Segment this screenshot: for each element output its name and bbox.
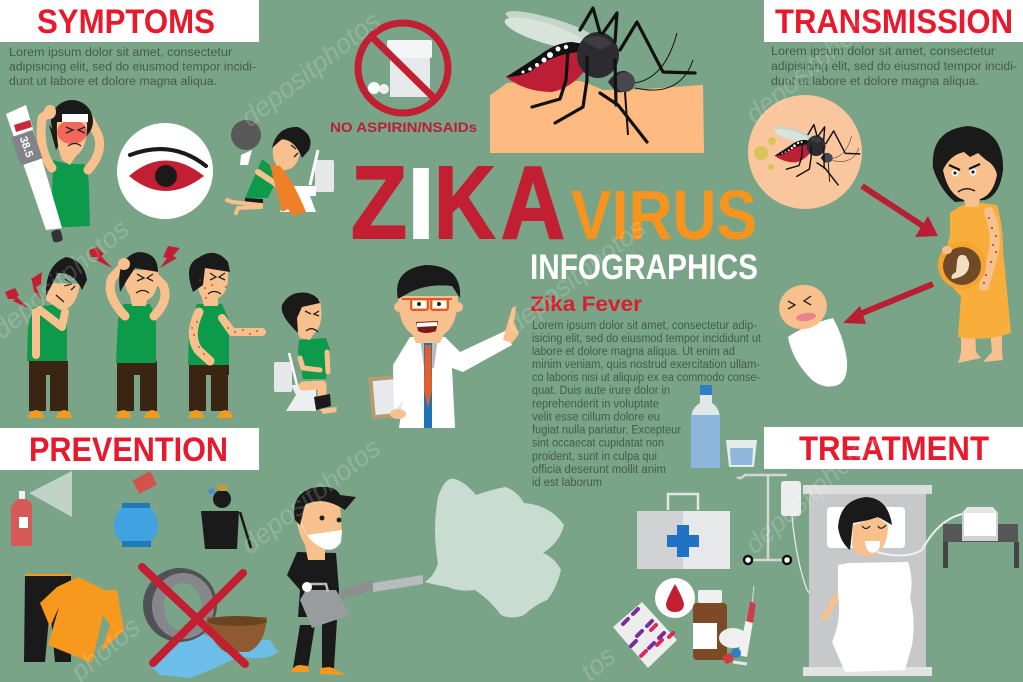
symptoms text block: Lorem ipsum dolor sit amet, consectetur [9, 47, 232, 59]
text block: zika fever description: reprehenderit in voluptate [532, 398, 659, 410]
symptoms heading: SYMPTOMS [37, 3, 215, 41]
label: no aspirin: NO ASPIRIN/NSAIDs [330, 119, 477, 135]
title: ZIKA: Z [351, 145, 407, 260]
icon: feverish man [41, 100, 100, 228]
text block: zika fever description: sint occaecat cupidatat non [532, 438, 664, 450]
icon: doctor [368, 265, 519, 428]
icon: man with headache [89, 246, 180, 418]
icon: insect spray [11, 471, 72, 546]
symptoms heading [0, 0, 259, 42]
text block: zika fever description: labore et dolore magna aliqua. Ut enim ad [532, 346, 735, 358]
title: ZIKA: A [501, 145, 565, 260]
icon: man with fogger [287, 487, 423, 675]
icon: pregnant woman [933, 126, 1011, 363]
text block: zika fever description: fugiat nulla pariatur. Excepteur [532, 424, 681, 436]
icon: thermometer: 38.5 [17, 135, 35, 159]
icon: mosquito in skin circle [748, 95, 862, 209]
icon: mosquito biting [502, 6, 695, 142]
watermarks: depositphotos [500, 213, 651, 340]
arrow: mother to baby [843, 284, 933, 324]
transmission text block: dunt ut labore et dolore magna aliqua. [771, 76, 979, 88]
icon: iv stand [737, 475, 838, 603]
watermarks: depositphotos [235, 6, 386, 133]
text block: zika fever description: velit esse cillum dolore eu [532, 412, 660, 424]
transmission text block [771, 46, 1017, 88]
panel: prevention [0, 428, 564, 678]
heading: zika fever: Zika Fever [530, 293, 642, 316]
icon: covered water jar [114, 471, 158, 547]
icon: standing water crossed out [142, 567, 278, 678]
icon: vomiting man [227, 120, 334, 216]
symptoms text block: adipisicing elit, sed do eiusmod tempor incidi- [9, 62, 256, 74]
arrow: mosquito to mother [862, 186, 938, 237]
watermarks: depositphotos [235, 433, 386, 560]
prevention heading: PREVENTION [29, 431, 228, 469]
text block: zika fever description: Lorem ipsum dolor sit amet, consectetur adip- [532, 320, 757, 332]
text block: zika fever description: co laboris nisi ut aliquip ex ea commodo conse- [532, 372, 760, 384]
icon: thermometer [6, 105, 63, 243]
icon: man on toilet [274, 292, 337, 414]
watermarks: depositphotos [739, 425, 884, 559]
icon: red eye [117, 123, 213, 219]
icon: medicine bottle [693, 590, 727, 660]
icon: patient in bed [803, 485, 932, 676]
transmission text block: Lorem ipsum dolor sit amet, consectetur [771, 46, 995, 58]
icon: pill pack [613, 602, 677, 668]
text block: zika fever description: proident, sunt in culpa qui [532, 451, 657, 463]
panel: treatment [613, 427, 1023, 676]
title: VIRUS: VIRUS [571, 176, 757, 254]
panel: symptoms [0, 0, 337, 418]
text block: zika fever description: minim veniam, quis nostrud exercitation ullam- [532, 359, 760, 371]
icon: crying baby [774, 280, 847, 387]
text block: zika fever description: id est laborum [532, 477, 602, 489]
treatment heading: TREATMENT [799, 430, 989, 468]
title: ZIKA [351, 145, 565, 261]
text block: zika fever description: isicing elit, sed do eiusmod tempor incididunt ut [532, 333, 762, 345]
icon: trash bin [201, 485, 251, 549]
text block: zika fever description: officia deserunt mollit anim [532, 464, 666, 476]
text block: zika fever description [532, 320, 762, 489]
subtitle: infographics: INFOGRAPHICS [530, 248, 758, 287]
symptoms text block: dunt ut labore et dolore magna aliqua. [9, 76, 217, 88]
icon: long clothes [24, 574, 124, 663]
watermarks: depositphotos [740, 0, 888, 130]
symptoms text block [9, 47, 256, 88]
title: ZIKA: I [406, 146, 436, 261]
icon: ventilator [877, 507, 1019, 568]
icon: no aspirin sign [358, 23, 448, 113]
icon: bandage and capsules [719, 628, 747, 665]
icon: first aid kit [637, 494, 730, 569]
icon: blood drop [655, 578, 695, 618]
title: ZIKA: K [434, 145, 495, 260]
icon: insecticide fog cloud [425, 479, 564, 618]
icon: syringe [733, 586, 756, 664]
panel: transmission [748, 0, 1023, 387]
icon: man with rash [188, 253, 262, 418]
text block: zika fever description: quat. Duis aute irure dolor in [532, 385, 670, 397]
icon: man with joint pain [5, 257, 87, 418]
transmission text block: adipisicing elit, sed do eiusmod tempor incidi- [771, 61, 1017, 73]
icon: water bottle and glass [691, 385, 757, 468]
icon: skin patch [490, 81, 704, 153]
